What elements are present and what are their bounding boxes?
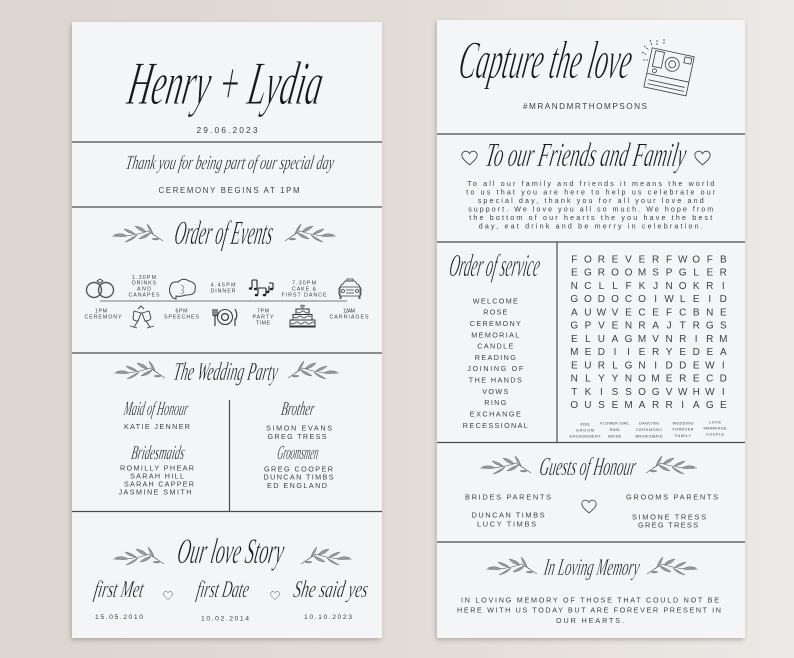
heading: Guests of Honour (537, 452, 639, 481)
bride parents: BRIDES PARENTS (465, 492, 551, 502)
service list: WELCOME (473, 296, 518, 306)
bride parents (465, 492, 551, 528)
service list: CEREMONY (470, 319, 521, 328)
word search word list: COUPLE (706, 432, 724, 436)
icon: wedding rings (86, 279, 114, 298)
sprig left (480, 456, 531, 474)
milestone: she said yes: 10.10.2023 (304, 614, 352, 621)
word search word list: RING (610, 428, 620, 432)
timeline labels: 4.45PM (210, 282, 236, 288)
word search grid: TKISSOGVWHWI (571, 387, 725, 398)
service list: VOWS (482, 387, 509, 396)
panel: to our friends and family (462, 136, 716, 230)
service list: RING (484, 398, 507, 407)
milestone: first met: 15.05.2010 (95, 614, 143, 621)
icon: taxi carriage (339, 279, 361, 299)
timeline labels: CEREMONY (84, 314, 122, 320)
timeline labels (84, 275, 369, 326)
word search grid: NLYYNOMERECD (571, 374, 727, 384)
sprig right (288, 361, 339, 379)
bride side list (118, 398, 194, 496)
sprig right (647, 557, 698, 575)
icon: speech cloud (169, 279, 195, 299)
service list: JOINING OF (467, 364, 524, 373)
service list: CANDLE (477, 342, 514, 350)
memorial text: OUR HEARTS. (556, 616, 624, 625)
groom parents: SIMONE TRESS (632, 512, 706, 522)
bride parents: DUNCAN TIMBS (472, 510, 545, 520)
timeline labels: 1.30PM (132, 275, 156, 281)
memorial text (457, 596, 721, 625)
groom side list (264, 398, 334, 490)
service list: EXCHANGE (470, 410, 521, 418)
icon: champagne glasses (130, 306, 154, 328)
icon: instant camera (642, 39, 694, 96)
icon: wedding cake (290, 305, 315, 327)
word search grid: EURLGNIDDEWI (571, 360, 725, 371)
timeline labels: 1PM (95, 308, 107, 314)
groom side list: GREG TRESS (268, 432, 327, 441)
milestone: first met (92, 576, 147, 621)
panel: left card (72, 22, 382, 638)
groom side list: DUNCAN TIMBS (264, 472, 334, 482)
message text: to us that you are here to help us celebrate our (466, 188, 716, 196)
timeline labels: 12AM (343, 308, 355, 314)
groom side list: GREG COOPER (264, 464, 333, 474)
timeline labels: DRINKS (132, 280, 156, 286)
word search word list: FOREVER (672, 428, 694, 432)
sprig right (646, 456, 697, 474)
bride side list: KATIE JENNER (124, 422, 190, 431)
word search grid: MEDIIERYEDEA (570, 347, 727, 358)
word search grid: GODOCOIWLEID (570, 294, 727, 305)
wedding date: 29.06.2023 (196, 125, 258, 135)
panel: right card (437, 20, 745, 638)
timeline labels: AND (137, 286, 151, 292)
sprig left (113, 547, 164, 565)
word search word list: FAMILY (675, 434, 691, 438)
groom side list: Brother (280, 398, 317, 420)
timeline labels: PARTY (252, 314, 274, 320)
word search word list: BRIDE (608, 434, 622, 438)
word search grid: EGROOMSPGLER (571, 268, 727, 278)
milestone: first date (195, 576, 252, 622)
panel: right card: Order of service (447, 247, 543, 283)
sprig right (301, 547, 352, 565)
sprig left (486, 557, 537, 575)
timeline labels: 6PM (176, 308, 188, 314)
bride side list: Bridesmaids (130, 442, 187, 464)
message text: the bottom of our hearts the you have the best (469, 214, 712, 222)
groom parents: GREG TRESS (638, 520, 698, 530)
bride side list: JASMINE SMITH (118, 488, 192, 496)
message text: day, eat drink and be merry in celebration. (479, 222, 703, 230)
word search word list: FLOWER GIRL (600, 422, 629, 426)
timeline labels: CAKE & (292, 286, 316, 292)
panel: order of events: Order of Events (172, 214, 276, 252)
memorial text: HERE WITH US TODAY BUT ARE FOREVER PRESENT IN (457, 606, 721, 614)
sprig right (285, 224, 336, 242)
milestone: she said yes (292, 576, 370, 621)
bride side list: Maid of Honour (122, 398, 190, 420)
word search word list: DANCING (639, 422, 659, 426)
heading: couple names: Henry + Lydia (122, 48, 329, 118)
bride parents: LUCY TIMBS (477, 520, 536, 528)
word search word list: CEREMONY (636, 428, 662, 432)
groom side list: Groomsmen (276, 442, 320, 464)
message text: special day, thank you for all your love and (478, 197, 704, 205)
groom parents (626, 492, 718, 530)
panel: order of service (447, 247, 543, 430)
panel: order of events (84, 214, 369, 328)
milestone: first date: first Date (195, 576, 252, 603)
groom side list: ED ENGLAND (267, 481, 327, 490)
word search word list: BRIDESMAID (636, 434, 663, 438)
groom side list: SIMON EVANS (266, 424, 332, 432)
milestone: she said yes: She said yes (292, 576, 370, 603)
word search grid: GPVENRAJTRGS (570, 320, 727, 332)
heading: our love story: Our love Story (175, 531, 288, 571)
icon: music notes (249, 280, 273, 296)
service list (463, 296, 528, 430)
panel: our love story (92, 531, 370, 622)
thank you block: CEREMONY BEGINS AT 1PM (158, 186, 300, 195)
timeline labels: FIRST DANCE (282, 292, 327, 298)
milestone: first met: first Met (92, 576, 147, 603)
icon: plate and cutlery (213, 309, 237, 326)
icon: heart (462, 151, 477, 165)
service list: RECESSIONAL (463, 421, 528, 430)
icon: heart (582, 500, 596, 513)
timeline labels: 7.30PM (292, 280, 316, 286)
word search word list: ENGAGEMENT (570, 434, 601, 438)
service list: ROSE (483, 308, 508, 316)
bride side list: SARAH HILL (130, 472, 184, 480)
icon: heart (270, 592, 280, 600)
thank you block: Thank you for being part of our special day (124, 152, 336, 174)
service list: READING (475, 353, 516, 362)
thank you block (124, 152, 336, 195)
milestone: first date: 10.02.2014 (201, 616, 249, 622)
message text: To all our family and friends it means the world (467, 180, 714, 188)
icon: heart (695, 151, 710, 165)
service list: MEMORIAL (471, 330, 519, 340)
word search grid: ELUAGMVNRIRM (571, 334, 727, 345)
panel: in loving memory (457, 554, 721, 625)
bride side list: ROMILLY PHEAR (120, 464, 194, 472)
timeline labels: CARRIAGES (330, 314, 369, 320)
bride side list: SARAH CAPPER (124, 480, 194, 488)
hashtag: #MRANDMRTHOMPSONS (523, 102, 648, 111)
word search word list: KISS (580, 422, 590, 426)
word search word list: MARRIAGE (704, 426, 727, 430)
timeline labels: SPEECHES (164, 314, 199, 320)
panel: the wedding party (114, 357, 339, 511)
timeline labels: TIME (256, 320, 270, 326)
memorial text: IN LOVING MEMORY OF THOSE THAT COULD NOT BE (461, 596, 719, 604)
heading: the wedding party: The Wedding Party (171, 357, 281, 386)
sprig left (112, 224, 163, 242)
timeline labels: CANAPES (128, 292, 160, 298)
panel: guests of honour (465, 452, 718, 530)
word search word list: LOVE (709, 420, 721, 424)
message text (466, 180, 716, 230)
service list: THE HANDS (469, 376, 522, 384)
timeline labels: DINNER (210, 288, 236, 294)
word search grid: NCLLFKJNOKRI (571, 281, 725, 292)
word search grid: FOREVERFWOFB (571, 254, 727, 265)
word search word list: GROOM (576, 428, 594, 432)
word search word list (570, 420, 727, 438)
timeline labels: 7PM (257, 308, 269, 314)
word search word list: WEDDING (672, 422, 694, 426)
icon: heart (164, 592, 172, 600)
sprig left (114, 361, 165, 379)
word search grid: AUWVECEFCBNE (571, 307, 727, 318)
word search grid: OUSEMARRIAGE (570, 400, 727, 411)
message text: support. We love you all so much. We hope from (468, 206, 713, 214)
heading: In Loving Memory (542, 554, 642, 581)
groom parents: GROOMS PARENTS (626, 492, 718, 502)
word search grid (570, 254, 727, 411)
